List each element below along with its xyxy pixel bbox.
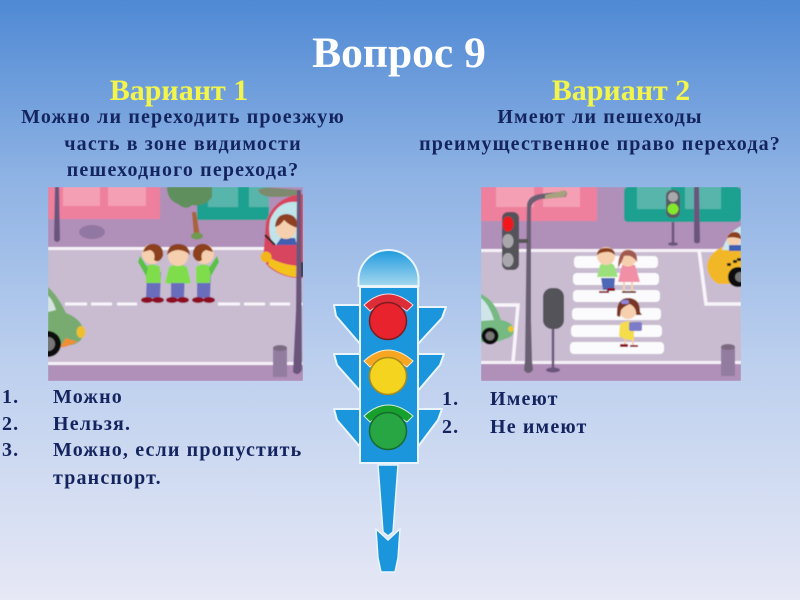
- dark sign post: [543, 288, 564, 372]
- question: variant 2: Имеют ли пешеходы: [497, 106, 703, 128]
- question: variant 2: преимущественное право перехода?: [419, 133, 781, 155]
- side visors: [334, 305, 446, 448]
- red vehicle with driver: [260, 194, 303, 278]
- boy left: [138, 244, 164, 303]
- red traffic signal and street lamp: [502, 190, 567, 373]
- pink building: [481, 187, 597, 221]
- lamp post right: [293, 190, 302, 374]
- question: variant 2: [419, 106, 781, 155]
- lot markings: [481, 250, 741, 362]
- answers: variant 2: Имеют: [490, 388, 559, 410]
- teal building: [197, 187, 269, 220]
- green car: [48, 287, 86, 358]
- boy and girl: [597, 247, 640, 293]
- answers: variant 1: Можно: [53, 386, 123, 408]
- road: [48, 248, 303, 363]
- heading: variant 2: Вариант 2: [552, 74, 690, 107]
- answers: variant 1: 3.: [2, 439, 19, 461]
- green car: [481, 294, 514, 344]
- red lamp: [364, 294, 413, 340]
- question: variant 1: [21, 106, 345, 181]
- boy middle: [165, 244, 191, 303]
- girl with bag: [617, 298, 642, 347]
- pink building: [48, 187, 160, 219]
- answers: variant 1: [2, 386, 302, 489]
- answers: variant 1: Нельзя.: [53, 413, 131, 435]
- panel: crosswalk scene variant 2: [481, 187, 748, 381]
- teal building: [624, 187, 741, 222]
- question: variant 1: пешеходного перехода?: [67, 159, 299, 181]
- dome: [358, 250, 418, 286]
- pedestrian crossing: [570, 256, 664, 354]
- answers: variant 2: [442, 388, 588, 438]
- traffic light illustration: [334, 250, 446, 572]
- question: variant 1: часть в зоне видимости: [64, 133, 302, 155]
- answers: variant 2: 2.: [442, 416, 459, 438]
- answers: variant 2: 1.: [442, 388, 459, 410]
- housing: [360, 287, 418, 463]
- taxi with driver: [706, 226, 741, 288]
- answers: variant 1: 1.: [2, 386, 19, 408]
- answers: variant 2: Не имеют: [490, 416, 588, 438]
- yellow lamp: [364, 350, 413, 394]
- lamp post left: [54, 187, 60, 242]
- title: Вопрос 9: [312, 29, 486, 77]
- boy right: [192, 244, 219, 303]
- answers: variant 1: 2.: [2, 413, 19, 435]
- answers: variant 1: Можно, если пропустить: [53, 439, 302, 461]
- pole tip: [376, 529, 400, 572]
- question: variant 1: Можно ли переходить проезжую: [21, 106, 345, 128]
- street bin: [273, 345, 287, 377]
- pole: [694, 187, 700, 244]
- green lamp: [364, 405, 413, 450]
- heading: variant 1: Вариант 1: [110, 74, 248, 107]
- lane markings: [65, 302, 303, 306]
- three boys: [138, 244, 219, 303]
- street lamp head: [258, 188, 300, 197]
- pole tail: [378, 465, 398, 536]
- street bin: [721, 344, 735, 376]
- answers: variant 1: транспорт.: [53, 467, 162, 489]
- tree: [167, 187, 212, 240]
- manhole: [79, 225, 105, 239]
- panel: street scene variant 1: [35, 187, 303, 381]
- green pedestrian signal: [666, 190, 680, 246]
- road: [481, 250, 741, 363]
